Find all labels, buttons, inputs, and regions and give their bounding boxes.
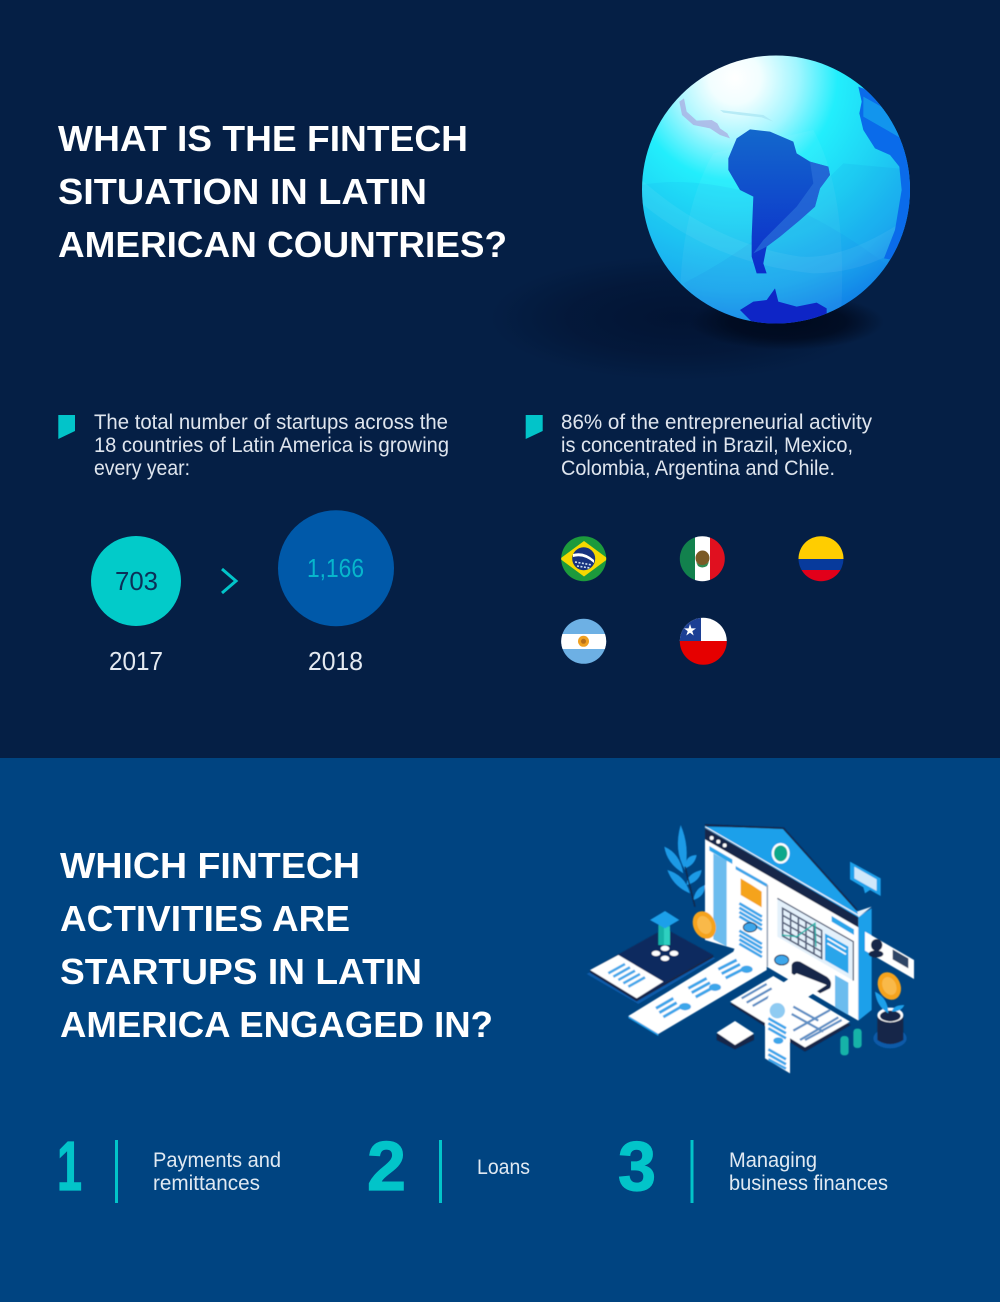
activity 3: managing business finances: 3 [618, 1127, 656, 1205]
stat: 1,166 startups in 2018: 2018 [308, 646, 363, 676]
heading: fintech activities [60, 845, 493, 1045]
flag: Argentina [560, 618, 608, 665]
status light [772, 843, 790, 864]
printer slot [792, 961, 831, 993]
chip [717, 1023, 754, 1049]
activity 3: managing business finances: business finances [729, 1172, 888, 1195]
teal cylinders [840, 1036, 849, 1055]
activity 1: payments and remittances: remittances [153, 1172, 260, 1195]
text: startups growing: The total number of startups across the [94, 411, 448, 434]
sidebar [713, 853, 727, 947]
activity 3: managing business finances: Managing [729, 1149, 817, 1172]
stat: 703 startups in 2017: 703 [115, 566, 158, 596]
translucent bands [642, 182, 753, 214]
text: entrepreneurial activity: 86% of the entrepreneurial activity [561, 411, 872, 434]
flag: Colombia [798, 535, 844, 582]
activity 2: loans: Loans [477, 1156, 530, 1179]
pillar [658, 925, 670, 945]
stat: 1,166 startups in 2018 [278, 510, 394, 676]
activity 2: loans: 2 [367, 1127, 406, 1205]
text: entrepreneurial activity [561, 411, 872, 480]
leaves [664, 825, 705, 907]
heading: fintech situation [58, 118, 507, 265]
bullet marker [58, 415, 75, 439]
heading: fintech activities: ACTIVITIES ARE [60, 898, 350, 939]
heading: fintech activities: WHICH FINTECH [60, 845, 360, 886]
bullet marker [526, 415, 543, 439]
activity 1: payments and remittances [57, 1127, 281, 1205]
text: entrepreneurial activity: Colombia, Argentina and Chile. [561, 457, 835, 480]
document on desk [730, 978, 851, 1052]
south america [728, 129, 830, 273]
stat: 703 startups in 2017 [91, 536, 181, 676]
antarctica [740, 288, 827, 327]
activity 1: payments and remittances: Payments and [153, 1149, 281, 1172]
stat: 1,166 startups in 2018: 1,166 [307, 553, 364, 583]
right landmass [858, 87, 913, 260]
arrow [222, 569, 236, 593]
heading: fintech situation: AMERICAN COUNTRIES? [58, 224, 507, 265]
tablet [587, 931, 715, 1004]
text: startups growing: every year: [94, 457, 190, 480]
text: startups growing [94, 411, 449, 480]
chart panel [777, 898, 853, 981]
text: entrepreneurial activity: is concentrated in Brazil, Mexico, [561, 434, 853, 457]
activity 3: managing business finances [618, 1127, 888, 1205]
isometric fintech illustration [587, 825, 914, 1073]
text: startups growing: 18 countries of Latin America is growing [94, 434, 449, 457]
heading: fintech activities: AMERICA ENGAGED IN? [60, 1004, 493, 1045]
flag: Mexico [679, 535, 726, 583]
title bar [705, 828, 858, 927]
heading: fintech situation: WHAT IS THE FINTECH [58, 118, 468, 159]
monitor roof [705, 827, 858, 917]
panel: Latin America fintech situation [58, 56, 910, 670]
heading: fintech activities: STARTUPS IN LATIN [60, 951, 422, 992]
panel: fintech activities [0, 758, 1000, 1302]
flag: Brazil [561, 536, 606, 582]
id card [865, 932, 914, 979]
receipt [765, 973, 827, 1073]
paper strip [628, 943, 767, 1034]
monitor face [705, 828, 858, 1021]
monitor side [858, 908, 872, 1021]
activity 1: payments and remittances: 1 [57, 1127, 82, 1205]
potted coin plant [873, 1028, 907, 1048]
speech bubble [850, 862, 881, 896]
stat: 703 startups in 2017: 2017 [109, 646, 163, 676]
coin [688, 907, 720, 943]
content column [736, 866, 767, 887]
central america [679, 98, 730, 138]
heading: fintech situation: SITUATION IN LATIN [58, 171, 427, 212]
globe illustration [548, 56, 910, 360]
activity 2: loans [367, 1127, 530, 1205]
flag: Chile [679, 617, 728, 666]
